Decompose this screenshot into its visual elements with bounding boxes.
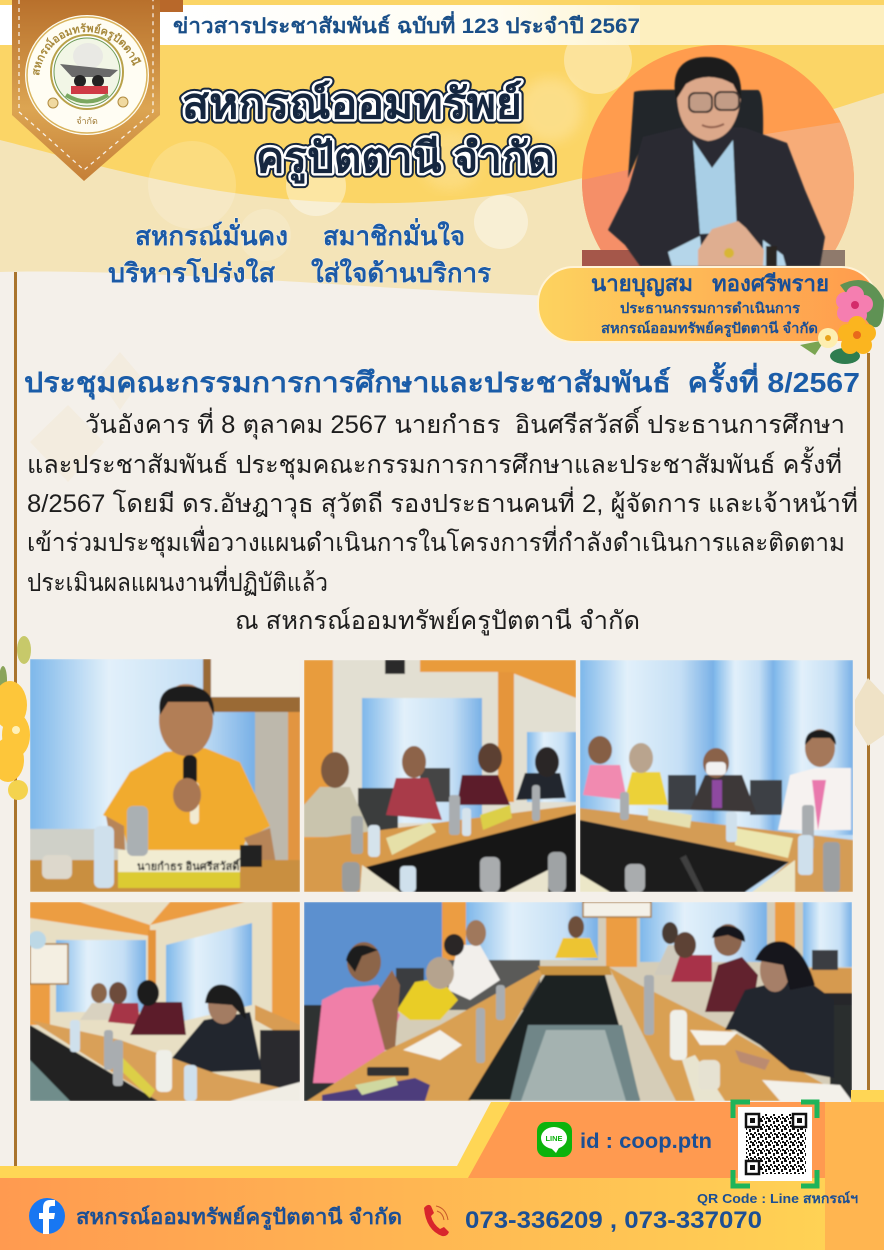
seated people: [80, 1003, 116, 1020]
slogan: สมาชิกมั่นใจ: [323, 217, 465, 251]
article body text: เข้าร่วมประชุมเพื่อวางแผนดำเนินการในโครงการที่กำลังดำเนินการและติดตาม: [27, 525, 845, 558]
top title bar: ข่าวสารประชาสัมพันธ์ ฉบับที่ 123 ประจำปี 2567: [173, 10, 640, 38]
footer contact panel background: [0, 1090, 884, 1250]
name plate: [116, 848, 242, 874]
article title: ประชุมคณะกรรมการการศึกษาและประชาสัมพันธ์ ครั้งที่ 8/2567: [24, 361, 860, 400]
icon: LINE: [537, 1122, 572, 1157]
main heading: สหกรณ์ออมทรัพย์: [182, 80, 522, 127]
chairs and shadow behind the left row: [304, 1005, 334, 1101]
left table arm and center: [307, 970, 545, 1101]
slogan: สหกรณ์มั่นคง: [135, 217, 288, 251]
left flower decoration: [0, 636, 31, 800]
tropical flowers: [800, 280, 884, 364]
logo seal: [25, 15, 149, 135]
photo 3: committee members wide view: [580, 660, 853, 892]
facebook page name: สหกรณ์ออมทรัพย์ครูปัตตานี จำกัด: [76, 1205, 402, 1231]
right ornament: [855, 678, 884, 746]
president name pill: นายบุญสม: [591, 271, 693, 298]
shirt: [693, 140, 737, 234]
suit: [608, 125, 825, 266]
photo 1: speaker with microphone: [30, 659, 300, 892]
slogan: ใส่ใจด้านบริการ: [311, 258, 491, 288]
main heading: ครูปัตตานี จำกัด: [256, 134, 555, 184]
icon: facebook: [29, 1198, 65, 1234]
QR code: [733, 1102, 817, 1186]
article body text: ณ สหกรณ์ออมทรัพย์ครูปัตตานี จำกัด: [235, 607, 640, 636]
main heading: ครูปัตตานี จำกัด: [256, 134, 555, 184]
president name pill: [538, 267, 877, 342]
president name pill: สหกรณ์ออมทรัพย์ครูปัตตานี จำกัด: [601, 320, 818, 337]
article body text: ประเมินผลแผนงานที่ปฏิบัติแล้ว: [27, 565, 328, 597]
icon: LINE: LINE: [545, 1134, 563, 1143]
speaker: [103, 748, 270, 855]
main heading: สหกรณ์ออมทรัพย์: [182, 80, 522, 127]
main heading: [182, 80, 555, 184]
table: [580, 808, 853, 892]
office chair: [628, 90, 763, 178]
hands: [698, 221, 764, 266]
right row people: [662, 922, 678, 944]
article body text: วันอังคาร ที่ 8 ตุลาคม 2567 นายกำธร อินศรีสวัสดิ์ ประธานการศึกษา: [85, 406, 845, 440]
slogan: บริหารโปร่งใส: [108, 257, 275, 288]
top title bar: [0, 5, 884, 45]
icon: phone: [424, 1205, 449, 1236]
seated people: [583, 765, 627, 800]
photo 4: meeting room side view: [28, 902, 300, 1101]
right table arm: [608, 966, 823, 1101]
slogan: [108, 217, 491, 288]
article body text: [27, 406, 858, 636]
ribbon banner with cooperative logo: [12, 0, 183, 181]
logo seal: สหกรณ์ออมทรัพย์ครูปัตตานี: [33, 22, 142, 76]
head: [677, 58, 741, 141]
QR caption: QR Code : Line สหกรณ์ฯ: [697, 1191, 858, 1206]
photo 2: committee members at table: [304, 660, 576, 892]
center chairman: [555, 938, 598, 958]
president portrait: [582, 45, 854, 266]
LINE id text: id : coop.ptn: [580, 1130, 712, 1153]
logo seal: จำกัด: [76, 116, 98, 126]
article body text: 8/2567 โดยมี ดร.อัษฎาวุธ สุวัตถี รองประธานคนที่ 2, ผู้จัดการ และเจ้าหน้าที่: [27, 486, 858, 519]
header background waves: [0, 0, 884, 301]
photo 1: speaker with microphone: นายกำธร อินศรีสวัสดิ์: [137, 858, 241, 873]
left row people: [448, 945, 500, 1000]
phone numbers: 073-336209 , 073-337070: [465, 1207, 762, 1234]
table: [304, 805, 576, 892]
photo 5: full boardroom view: [304, 902, 852, 1101]
president name pill: ประธานกรรมการดำเนินการ: [620, 300, 800, 316]
side border lines: [14, 272, 870, 1166]
seated people: [420, 768, 450, 802]
article body text: และประชาสัมพันธ์ ประชุมคณะกรรมการการศึกษาและประชาสัมพันธ์ ครั้งที่: [27, 446, 842, 480]
table: [30, 1020, 282, 1101]
president name pill: ทองศรีพราย: [712, 271, 829, 296]
bottle and thermos: [127, 806, 148, 856]
faint thai ornaments: [30, 352, 142, 482]
